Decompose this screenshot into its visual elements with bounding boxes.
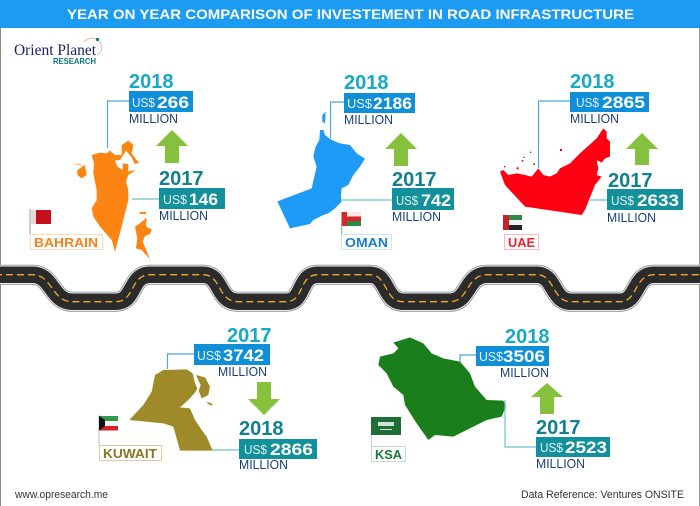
connector: 2017 — [505, 400, 536, 447]
year 2017: 2017 — [159, 168, 204, 190]
value box 2018 — [344, 93, 415, 113]
map: UAE — [500, 128, 610, 215]
panel: Oman — [277, 72, 454, 250]
value box 2017: US$ — [396, 193, 419, 208]
year 2017: 2017 — [608, 170, 652, 192]
value box 2018: 266 — [157, 93, 189, 112]
connector: 2017 — [132, 198, 159, 200]
connector: 2017 — [342, 199, 392, 201]
arrow up — [156, 130, 188, 163]
year 2018: 2018 — [239, 418, 284, 440]
map: Bahrain — [72, 141, 152, 259]
unit: MILLION — [129, 112, 178, 126]
value box 2017 — [536, 437, 610, 457]
value box 2018: US$ — [132, 95, 156, 110]
year 2017: 2017 — [536, 417, 580, 439]
arrow up — [385, 133, 417, 166]
connector: 2017 — [590, 199, 607, 201]
flag: Oman — [341, 212, 361, 234]
panel: UAE — [500, 71, 683, 250]
year 2018: 2018 — [505, 326, 550, 348]
value box 2018: 2866 — [270, 440, 313, 459]
value box 2017: US$ — [197, 348, 222, 363]
logo: Orient Planet Research: RESEARCH — [53, 56, 96, 66]
panel: KSA — [371, 326, 610, 471]
value box 2017: US$ — [163, 192, 188, 207]
flag: Bahrain — [30, 209, 51, 234]
value box 2018 — [239, 439, 317, 459]
value box 2018: 2186 — [373, 94, 412, 113]
year 2018: 2018 — [570, 71, 614, 93]
arrow down — [248, 382, 280, 415]
logo: Orient Planet Research — [14, 38, 102, 66]
title: YEAR ON YEAR COMPARISON OF INVESTEMENT IN ROAD INFRASTRUCTURE — [67, 6, 634, 22]
connector: 2018 — [538, 101, 570, 168]
unit: MILLION — [607, 211, 656, 225]
unit: MILLION — [500, 366, 549, 380]
arrow up — [626, 133, 658, 165]
flag: Kuwait — [98, 415, 118, 445]
panel: Bahrain — [30, 71, 225, 259]
country label: KSA — [375, 447, 403, 462]
connector: 2018 — [460, 355, 476, 362]
map: Oman — [277, 112, 365, 228]
value box 2017 — [392, 188, 454, 210]
value box 2018: US$ — [479, 349, 504, 364]
value box 2017: 742 — [421, 191, 451, 210]
value box 2017: 146 — [189, 190, 218, 209]
year 2017: 2017 — [227, 325, 272, 347]
unit: MILLION — [218, 365, 267, 379]
value box 2018: US$ — [347, 96, 373, 111]
map: Kuwait — [129, 369, 213, 451]
value box 2018 — [129, 91, 193, 112]
connector: 2018 — [108, 101, 129, 148]
value box 2018 — [476, 346, 549, 366]
unit: MILLION — [344, 113, 393, 127]
country label: BAHRAIN — [34, 235, 98, 250]
unit: MILLION — [239, 458, 288, 472]
title — [0, 0, 700, 28]
footer: website: www.opresearch.me — [14, 489, 108, 501]
year 2017: 2017 — [392, 169, 436, 191]
connector: 2018 — [213, 449, 239, 451]
country label: OMAN — [345, 235, 388, 250]
connector: 2018 — [330, 102, 344, 138]
value box 2018: 2865 — [602, 93, 645, 112]
year 2018: 2018 — [129, 71, 174, 93]
value box 2017 — [159, 188, 225, 209]
value box 2017: 3742 — [223, 346, 264, 365]
value box 2017: 2633 — [637, 191, 679, 210]
country label: UAE — [508, 235, 535, 250]
arrow up — [531, 383, 563, 414]
panel: Kuwait — [98, 325, 317, 472]
unit: MILLION — [159, 209, 208, 223]
value box 2017: US$ — [540, 440, 564, 455]
footer: data reference: Data Reference: Ventures ONSITE — [521, 489, 684, 501]
value box 2017: US$ — [611, 193, 635, 208]
flag: KSA — [371, 417, 401, 446]
value box 2017: 2523 — [565, 438, 607, 457]
logo: Orient Planet Research: Orient Planet — [14, 42, 97, 59]
value box 2018: US$ — [244, 442, 268, 457]
country label: KUWAIT — [103, 446, 157, 461]
road — [0, 275, 700, 302]
unit: MILLION — [536, 457, 585, 471]
flag: UAE — [503, 215, 522, 230]
unit: MILLION — [392, 210, 441, 224]
value box 2018 — [570, 92, 649, 112]
value box 2018: US$ — [576, 95, 600, 110]
unit: MILLION — [570, 112, 619, 126]
year 2018: 2018 — [344, 72, 388, 94]
map: KSA — [378, 337, 506, 440]
connector: 2017 — [168, 354, 194, 369]
value box 2017 — [607, 189, 683, 210]
value box 2018: 3506 — [503, 347, 545, 366]
value box 2017 — [194, 344, 270, 365]
